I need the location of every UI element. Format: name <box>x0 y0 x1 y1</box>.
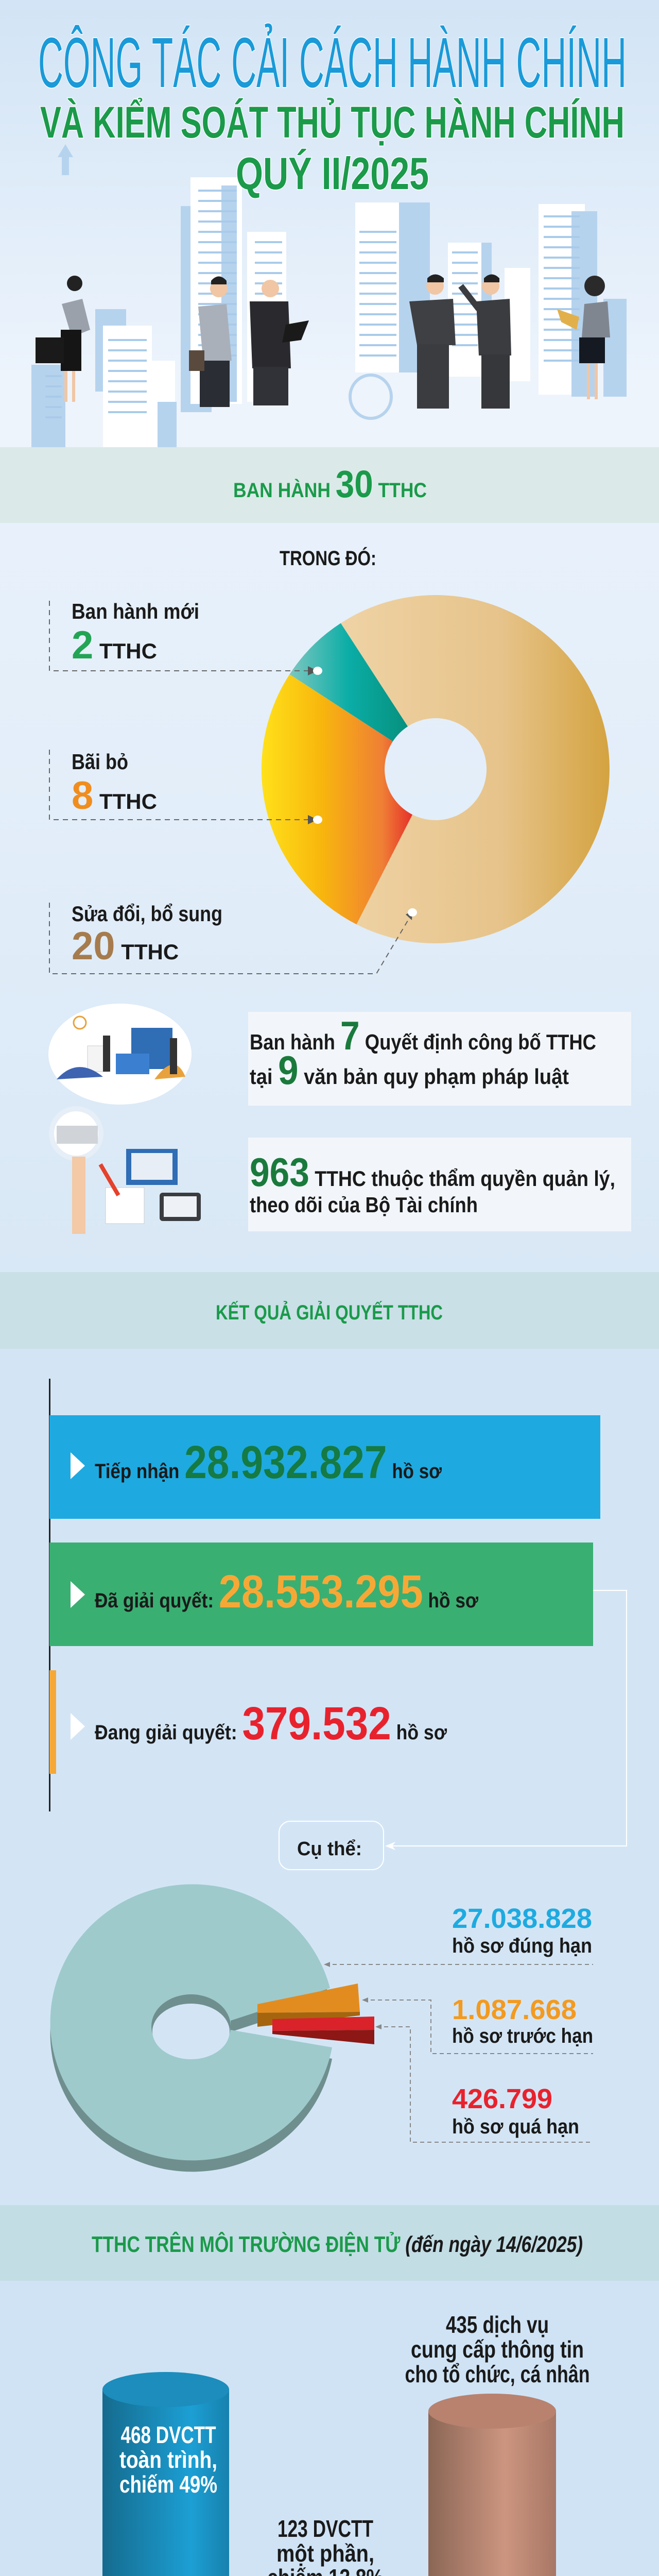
label: đúng hạn <box>324 1903 593 1967</box>
bar: tiếp nhận <box>49 1415 600 1519</box>
label: đúng hạn: 27.038.828 <box>452 1903 592 1934</box>
label: quá hạn <box>375 2024 593 2142</box>
panel: 963 TTHC <box>51 1109 631 1234</box>
label: quá hạn: 426.799 <box>452 2083 552 2114</box>
panel: 963 TTHC: theo dõi của Bộ Tài chính <box>250 1193 478 1217</box>
section 3 heading band: TTHC TRÊN MÔI TRƯỜNG ĐIỆN TỬ (đến ngày 14/6/2025) <box>92 2231 583 2257</box>
bar: tiếp nhận: Tiếp nhận 28.932.827 hồ sơ <box>95 1437 442 1488</box>
cylinder: 435 dịch vụ: cho tổ chức, cá nhân <box>405 2361 590 2387</box>
label: sửa đổi, bổ sung: Sửa đổi, bổ sung <box>72 902 222 926</box>
cylinder: 468 DVCTT: toàn trình, <box>119 2446 217 2473</box>
label: sửa đổi, bổ sung <box>49 902 417 974</box>
cylinder: 435 dịch vụ: cung cấp thông tin <box>411 2336 584 2363</box>
title: QUÝ II/2025 <box>236 148 429 199</box>
label: ban hành mới: Ban hành mới <box>72 599 199 623</box>
section 3 heading band <box>0 2205 659 2281</box>
arrow: connector to cụ thể <box>385 1590 627 1850</box>
label: trước hạn: 1.087.668 <box>452 1994 577 2025</box>
panel: 963 TTHC: 963 TTHC thuộc thẩm quyền quản lý, <box>250 1149 615 1195</box>
axis line <box>49 1379 50 1811</box>
illustration: city skyline <box>31 144 627 547</box>
title <box>38 23 627 199</box>
person: woman with folder <box>557 276 610 399</box>
section 3 background <box>0 2281 659 2576</box>
bar: đã giải quyết: Đã giải quyết: 28.553.295 hồ sơ <box>95 1566 478 1618</box>
label: ban hành mới <box>49 599 322 675</box>
panel: 7 quyết định: Ban hành 7 Quyết định công bố TTHC <box>250 1013 596 1058</box>
icon: office illustration <box>48 1004 192 1105</box>
label: bãi bỏ: Bãi bỏ <box>72 750 128 774</box>
label: ban hành mới: 2 TTHC <box>72 623 157 667</box>
cylinder: 123 DVCTT: một phần, <box>276 2540 374 2567</box>
label: đúng hạn: hồ sơ đúng hạn <box>452 1935 592 1957</box>
section 2 background <box>0 1349 659 2207</box>
label: bãi bỏ: 8 TTHC <box>72 774 157 818</box>
cylinder: 468 DVCTT: chiếm 49% <box>119 2471 217 2498</box>
cylinder: 468 DVCTT <box>102 2372 229 2576</box>
section 1 heading band: BAN HÀNH 30 TTHC <box>233 463 427 505</box>
callout: cụ thể <box>279 1821 384 1870</box>
person: man with laptop <box>250 280 309 405</box>
label: trước hạn <box>362 1994 593 2054</box>
person: man with bag <box>189 276 232 407</box>
cylinder: 435 dịch vụ <box>405 2311 590 2576</box>
bar: đang giải quyết: Đang giải quyết: 379.532 hồ sơ <box>95 1698 447 1750</box>
section 2 heading band: KẾT QUẢ GIẢI QUYẾT TTHC <box>216 1300 443 1324</box>
icon: magnifier and devices <box>51 1109 201 1234</box>
section 1 background <box>0 523 659 1273</box>
subheading: trong đó: TRONG ĐÓ: <box>280 546 376 570</box>
person: businessman 2 <box>461 274 511 409</box>
panel: 7 quyết định: tại 9 văn bản quy phạm pháp luật <box>250 1047 569 1093</box>
illustration: business people <box>36 274 610 409</box>
label: sửa đổi, bổ sung: 20 TTHC <box>72 924 179 968</box>
cylinder: 435 dịch vụ: 435 dịch vụ <box>446 2311 549 2338</box>
cylinder: 123 DVCTT <box>263 2515 389 2576</box>
section 2 heading band <box>0 1272 659 1349</box>
person: woman with briefcase <box>36 276 90 402</box>
callout: cụ thể: Cụ thể: <box>297 1838 362 1860</box>
person: businessman 1 <box>409 274 456 409</box>
cylinder: 468 DVCTT: 468 DVCTT <box>120 2421 216 2448</box>
pie chart: hồ sơ status <box>50 1884 374 2172</box>
label: trước hạn: hồ sơ trước hạn <box>452 2025 593 2047</box>
bar: đang giải quyết <box>49 1670 447 1774</box>
header background <box>0 0 659 448</box>
cylinder: 123 DVCTT: 123 DVCTT <box>278 2515 373 2542</box>
donut chart: TTHC breakdown <box>262 595 610 943</box>
panel: 7 quyết định <box>48 1004 631 1106</box>
section 1 heading band <box>0 447 659 523</box>
bar: đã giải quyết <box>49 1543 593 1646</box>
label: quá hạn: hồ sơ quá hạn <box>452 2115 579 2138</box>
label: bãi bỏ <box>49 750 322 824</box>
